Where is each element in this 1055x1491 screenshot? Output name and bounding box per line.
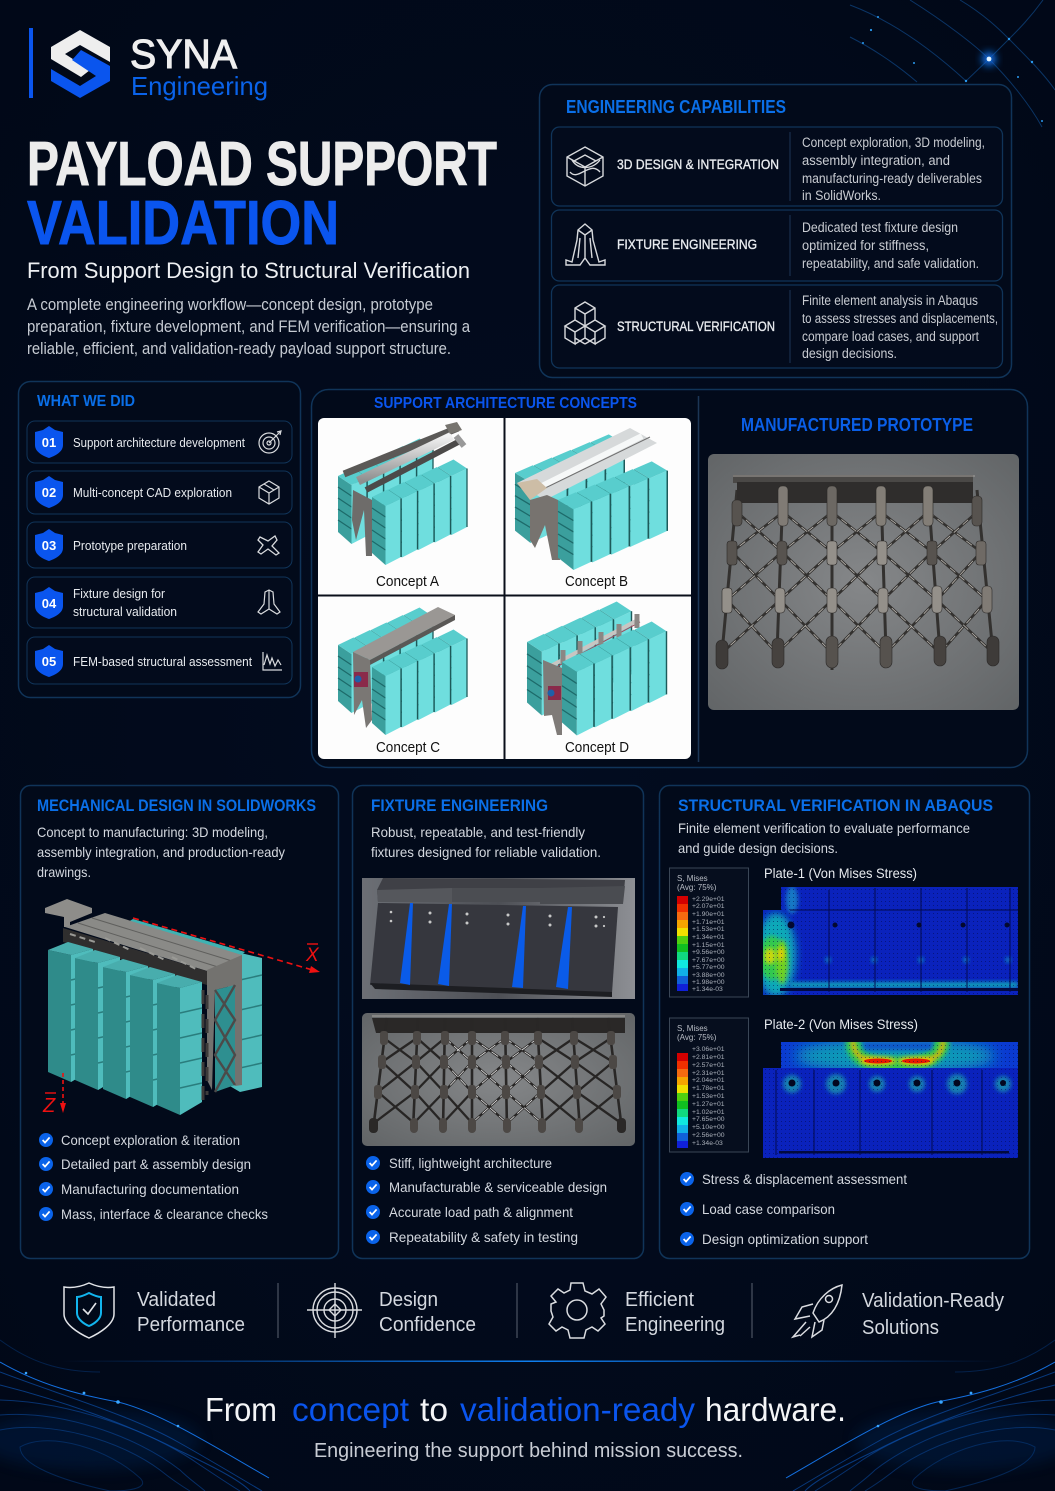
description: Finite element verification to evaluate performance <box>678 820 970 836</box>
benefit: validated performance: Performance <box>137 1314 245 1336</box>
top right network decoration <box>850 0 1055 127</box>
row: 3D design <box>552 127 1002 206</box>
heading: manufactured prototype: MANUFACTURED PROTOTYPE <box>741 415 973 435</box>
heading: abaqus: STRUCTURAL VERIFICATION IN ABAQUS <box>678 797 993 815</box>
heading: mechanical design: MECHANICAL DESIGN IN SOLIDWORKS <box>37 797 316 815</box>
bullet list: Concept exploration & iteration <box>61 1132 240 1148</box>
row: fixture engineering <box>552 210 1002 281</box>
step 03: Prototype preparation <box>73 538 187 553</box>
intro text: reliable, efficient, and validation-ready payload support structure. <box>27 340 451 358</box>
legend: plate 1: +1.53e+01 <box>692 926 725 933</box>
benefit: validation-ready solutions: Solutions <box>862 1317 939 1339</box>
heading: fixture engineering: FIXTURE ENGINEERING <box>371 797 548 815</box>
concept grid <box>318 418 691 759</box>
legend: plate 1: (Avg: 75%) <box>677 883 717 892</box>
benefit: efficient engineering <box>549 1283 725 1338</box>
row: fixture engineering: optimized for stiffness, <box>802 238 929 253</box>
row: 3D design: manufacturing-ready deliverables <box>802 171 982 186</box>
bullet list <box>680 1171 907 1247</box>
panel: concepts and prototype <box>312 390 1028 768</box>
legend: plate 1: +9.56e+00 <box>692 949 725 956</box>
legend: plate 2 <box>670 1018 748 1152</box>
legend: plate 2: +2.31e+01 <box>692 1070 725 1077</box>
axis X arrow: X <box>305 945 320 966</box>
benefit: validated performance <box>64 1283 245 1338</box>
bullet list <box>39 1132 268 1222</box>
FEM plot: plate 1 <box>756 886 1018 997</box>
legend: plate 2: (Avg: 75%) <box>677 1033 717 1042</box>
prototype photo <box>708 454 1019 710</box>
row: 3D design: assembly integration, and <box>802 153 950 168</box>
concept B: Concept B <box>565 574 628 590</box>
legend: plate 1: +1.15e+01 <box>692 942 725 949</box>
closing tagline: From <box>205 1391 277 1428</box>
closing tagline: concept <box>292 1391 409 1428</box>
row: structural verification <box>552 285 1002 368</box>
logo: SYNA <box>130 31 238 77</box>
legend: plate 1: +1.71e+01 <box>692 919 725 926</box>
row: 3D design: Concept exploration, 3D modeling, <box>802 135 985 150</box>
subtitle: From Support Design to Structural Verification <box>27 258 470 283</box>
legend: plate 2: +2.04e+01 <box>692 1077 725 1084</box>
description: assembly integration, and production-ready <box>37 844 285 860</box>
description: and guide design decisions. <box>678 840 838 856</box>
row: structural verification: to assess stresses and displacements, <box>802 311 998 326</box>
closing tagline: validation-ready <box>460 1391 696 1428</box>
step 03: 03 <box>42 538 56 553</box>
benefit: design confidence <box>307 1283 476 1338</box>
intro text: A complete engineering workflow—concept design, prototype <box>27 296 433 314</box>
legend: plate 1: +1.34e+01 <box>692 934 725 941</box>
legend: plate 1: +2.29e+01 <box>692 896 725 903</box>
legend: plate 2: S, Mises <box>677 1024 708 1033</box>
legend: plate 2: +1.78e+01 <box>692 1085 725 1092</box>
bullet list: Manufacturable & serviceable design <box>389 1179 607 1195</box>
heading: what we did: WHAT WE DID <box>37 393 135 410</box>
description <box>37 824 285 880</box>
FEM plot: plate 2 <box>763 1038 1018 1158</box>
bullet list: Mass, interface & clearance checks <box>61 1206 268 1222</box>
row: structural verification: Finite element analysis in Abaqus <box>802 293 978 308</box>
step 05: FEM-based structural assessment <box>73 654 252 669</box>
panel: mechanical design <box>20 786 338 1258</box>
step 02: Multi-concept CAD exploration <box>73 485 232 500</box>
step 01: 01 <box>42 435 56 450</box>
panel: engineering capabilities <box>540 84 1012 378</box>
legend: plate 2: +7.65e+00 <box>692 1116 725 1123</box>
step 04 <box>27 577 292 628</box>
concept D <box>527 602 666 756</box>
row: structural verification: compare load cases, and support <box>802 329 979 344</box>
benefit: design confidence: Design <box>379 1289 438 1311</box>
bullet list <box>366 1155 607 1245</box>
description: Robust, repeatable, and test-friendly <box>371 824 585 840</box>
row: fixture engineering: FIXTURE ENGINEERING <box>617 236 757 252</box>
legend: plate 2: +1.02e+01 <box>692 1109 725 1116</box>
legend: plate 2: +2.56e+00 <box>692 1132 725 1139</box>
step 01 <box>27 421 292 463</box>
benefit: efficient engineering: Efficient <box>625 1289 694 1311</box>
row: 3D design: 3D DESIGN & INTEGRATION <box>617 156 779 172</box>
fixture photo <box>362 1013 635 1146</box>
concept A <box>338 422 467 590</box>
legend: plate 2: +2.81e+01 <box>692 1054 725 1061</box>
concept A: Concept A <box>376 574 439 590</box>
step 05 <box>27 637 292 684</box>
benefit: validated performance: Validated <box>137 1289 216 1311</box>
bullet list: Stiff, lightweight architecture <box>389 1155 552 1171</box>
step 05: 05 <box>42 654 56 669</box>
legend: plate 1: +5.77e+00 <box>692 964 725 971</box>
axis Z arrow: Z <box>42 1095 56 1117</box>
step 03 <box>27 522 292 568</box>
legend: plate 2: +5.10e+00 <box>692 1124 725 1131</box>
bullet list: Load case comparison <box>702 1201 835 1217</box>
closing tagline: to <box>420 1391 448 1428</box>
concept D: Concept D <box>565 740 629 756</box>
closing subline: Engineering the support behind mission success. <box>314 1440 743 1462</box>
benefit: design confidence: Confidence <box>379 1314 476 1336</box>
concept B <box>515 428 667 590</box>
step 04: structural validation <box>73 604 177 619</box>
description: fixtures designed for reliable validation. <box>371 844 601 860</box>
heading: support architecture concepts: SUPPORT ARCHITECTURE CONCEPTS <box>374 395 637 412</box>
legend: plate 1: S, Mises <box>677 874 708 883</box>
description <box>371 824 601 860</box>
row: 3D design: in SolidWorks. <box>802 188 881 203</box>
row: structural verification: design decisions. <box>802 346 897 361</box>
panel: fixture engineering <box>352 786 644 1258</box>
legend: plate 1: +1.98e+00 <box>692 979 725 986</box>
logo: Engineering <box>131 71 268 101</box>
title: PAYLOAD SUPPORT <box>27 130 497 199</box>
axis X arrow <box>133 918 320 973</box>
title: VALIDATION <box>27 189 339 258</box>
bullet list: Design optimization support <box>702 1231 868 1247</box>
bullet list: Manufacturing documentation <box>61 1181 239 1197</box>
intro text <box>27 296 471 358</box>
legend: plate 1: +7.67e+00 <box>692 957 725 964</box>
description: Concept to manufacturing: 3D modeling, <box>37 824 268 840</box>
step 01: Support architecture development <box>73 435 245 450</box>
bullet list: Detailed part & assembly design <box>61 1156 251 1172</box>
legend: plate 2: +3.06e+01 <box>692 1046 725 1053</box>
intro text: preparation, fixture development, and FEM verification—ensuring a <box>27 318 471 336</box>
legend: plate 1: +1.34e-03 <box>692 986 723 993</box>
closing tagline: hardware. <box>705 1391 846 1428</box>
row: fixture engineering: Dedicated test fixture design <box>802 220 958 235</box>
benefit: validation-ready solutions: Validation-Ready <box>862 1290 1004 1312</box>
legend: plate 1: +2.07e+01 <box>692 903 725 910</box>
concept C: Concept C <box>376 740 440 756</box>
closing tagline <box>205 1391 846 1428</box>
axis Z arrow <box>42 1073 66 1117</box>
step 02: 02 <box>42 485 56 500</box>
plate 2 label: Plate-2 (Von Mises Stress) <box>764 1016 918 1032</box>
legend: plate 1 <box>670 868 748 997</box>
description <box>678 820 970 856</box>
fixture CAD image <box>362 878 635 999</box>
concept C <box>338 607 467 756</box>
legend: plate 2: +1.34e-03 <box>692 1140 723 1147</box>
bullet list: Accurate load path & alignment <box>389 1204 573 1220</box>
step 04: 04 <box>42 596 57 611</box>
panel: what we did <box>18 382 300 698</box>
panel: abaqus verification <box>660 786 1030 1258</box>
plate 1 label: Plate-1 (Von Mises Stress) <box>764 865 917 881</box>
legend: plate 2: +2.57e+01 <box>692 1062 725 1069</box>
row: fixture engineering: repeatability, and safe validation. <box>802 256 979 271</box>
bullet list: Repeatability & safety in testing <box>389 1229 578 1245</box>
legend: plate 2: +1.27e+01 <box>692 1101 725 1108</box>
benefit: efficient engineering: Engineering <box>625 1314 725 1336</box>
step 04: Fixture design for <box>73 586 166 601</box>
legend: plate 1: +3.88e+00 <box>692 972 725 979</box>
legend: plate 1: +1.90e+01 <box>692 911 725 918</box>
title <box>27 130 497 258</box>
bullet list: Stress & displacement assessment <box>702 1171 907 1187</box>
benefit: validation-ready solutions <box>793 1285 1004 1339</box>
legend: plate 2: +1.53e+01 <box>692 1093 725 1100</box>
CAD assembly <box>45 899 262 1115</box>
heading: engineering capabilities: ENGINEERING CAPABILITIES <box>566 97 786 117</box>
bottom wave decoration <box>0 1340 1055 1491</box>
logo <box>29 28 268 101</box>
step 02 <box>27 471 292 514</box>
description: drawings. <box>37 864 91 880</box>
row: structural verification: STRUCTURAL VERIFICATION <box>617 318 775 334</box>
